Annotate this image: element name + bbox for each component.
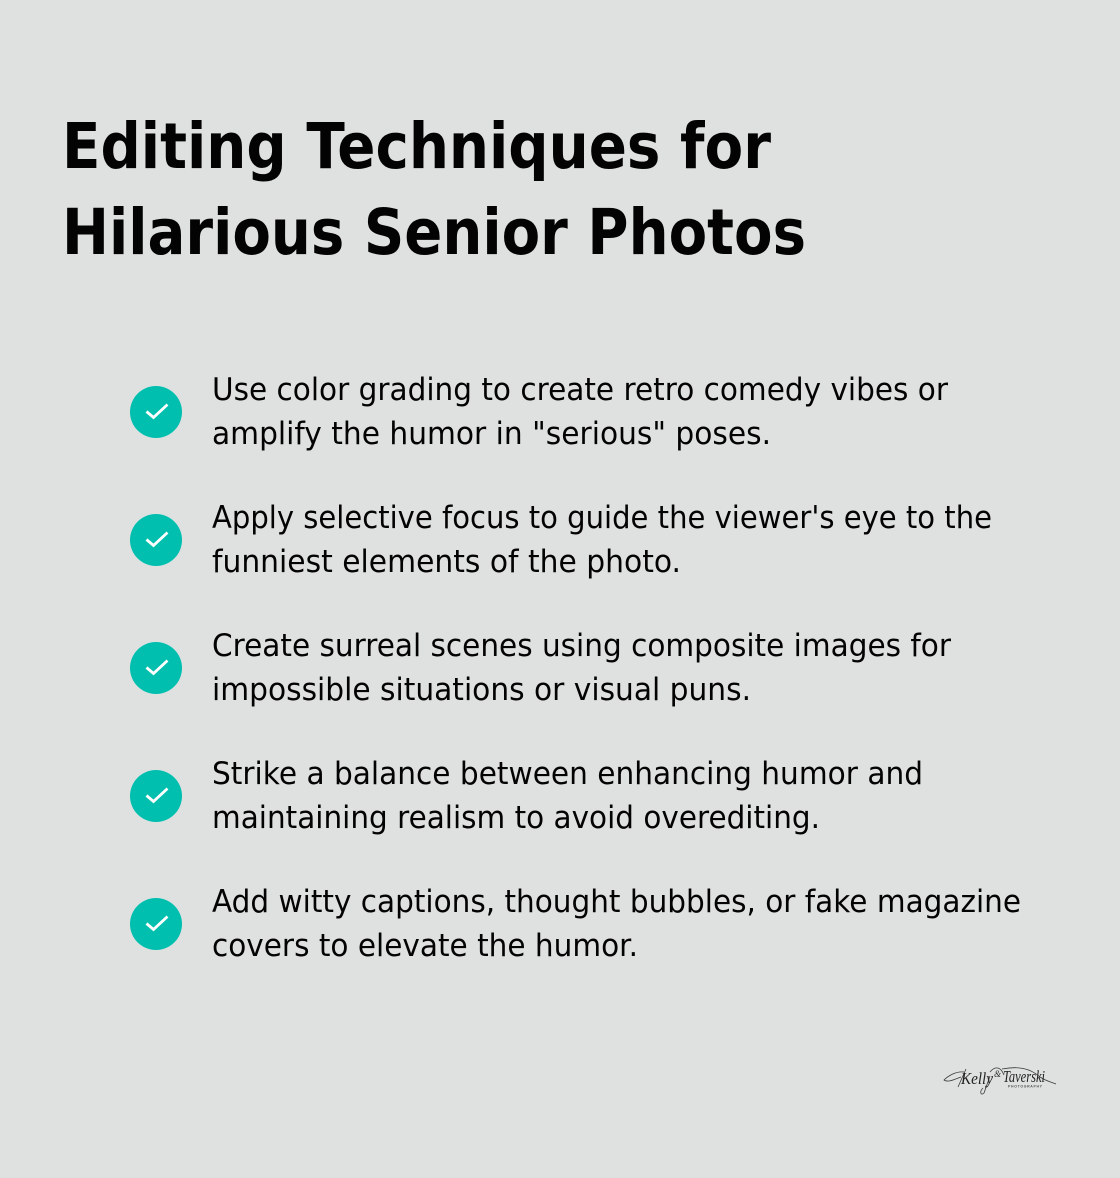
text: color grading xyxy=(212,372,948,452)
text: color grading: Use color grading to create retro comedy vibes or xyxy=(212,372,948,408)
text: captions: covers to elevate the humor. xyxy=(212,928,638,964)
icon: check mark xyxy=(130,770,182,822)
text: selective focus xyxy=(212,500,992,580)
icon: check mark xyxy=(130,898,182,950)
list item: color grading xyxy=(130,372,948,452)
text: captions xyxy=(212,884,1021,964)
icon: check mark xyxy=(130,642,182,694)
text: selective focus: funniest elements of the photo. xyxy=(212,544,681,580)
text: color grading: amplify the humor in "serious" poses. xyxy=(212,416,771,452)
text: captions: Add witty captions, thought bubbles, or fake magazine xyxy=(212,884,1021,920)
text: composite images: Create surreal scenes using composite images for xyxy=(212,628,951,664)
logo: photographer signature: PHOTOGRAPHY xyxy=(1008,1084,1043,1088)
text: balance xyxy=(212,756,923,836)
title: Hilarious Senior Photos xyxy=(62,196,806,269)
title xyxy=(62,110,806,269)
text: composite images xyxy=(212,628,951,708)
list item: captions xyxy=(130,884,1021,964)
title: Editing Techniques for xyxy=(62,110,771,183)
checklist xyxy=(130,372,1021,964)
logo: photographer signature: & xyxy=(994,1069,1001,1079)
logo: photographer signature: Kelly xyxy=(960,1069,993,1088)
logo: photographer signature: Taverski xyxy=(1003,1067,1045,1086)
text: balance: maintaining realism to avoid overediting. xyxy=(212,800,820,836)
icon: check mark xyxy=(130,386,182,438)
list item: balance xyxy=(130,756,923,836)
list item: selective focus xyxy=(130,500,992,580)
icon: check mark xyxy=(130,514,182,566)
text: composite images: impossible situations or visual puns. xyxy=(212,672,751,708)
text: selective focus: Apply selective focus to guide the viewer's eye to the xyxy=(212,500,992,536)
list item: composite images xyxy=(130,628,951,708)
logo: photographer signature xyxy=(944,1067,1056,1094)
text: balance: Strike a balance between enhancing humor and xyxy=(212,756,923,792)
